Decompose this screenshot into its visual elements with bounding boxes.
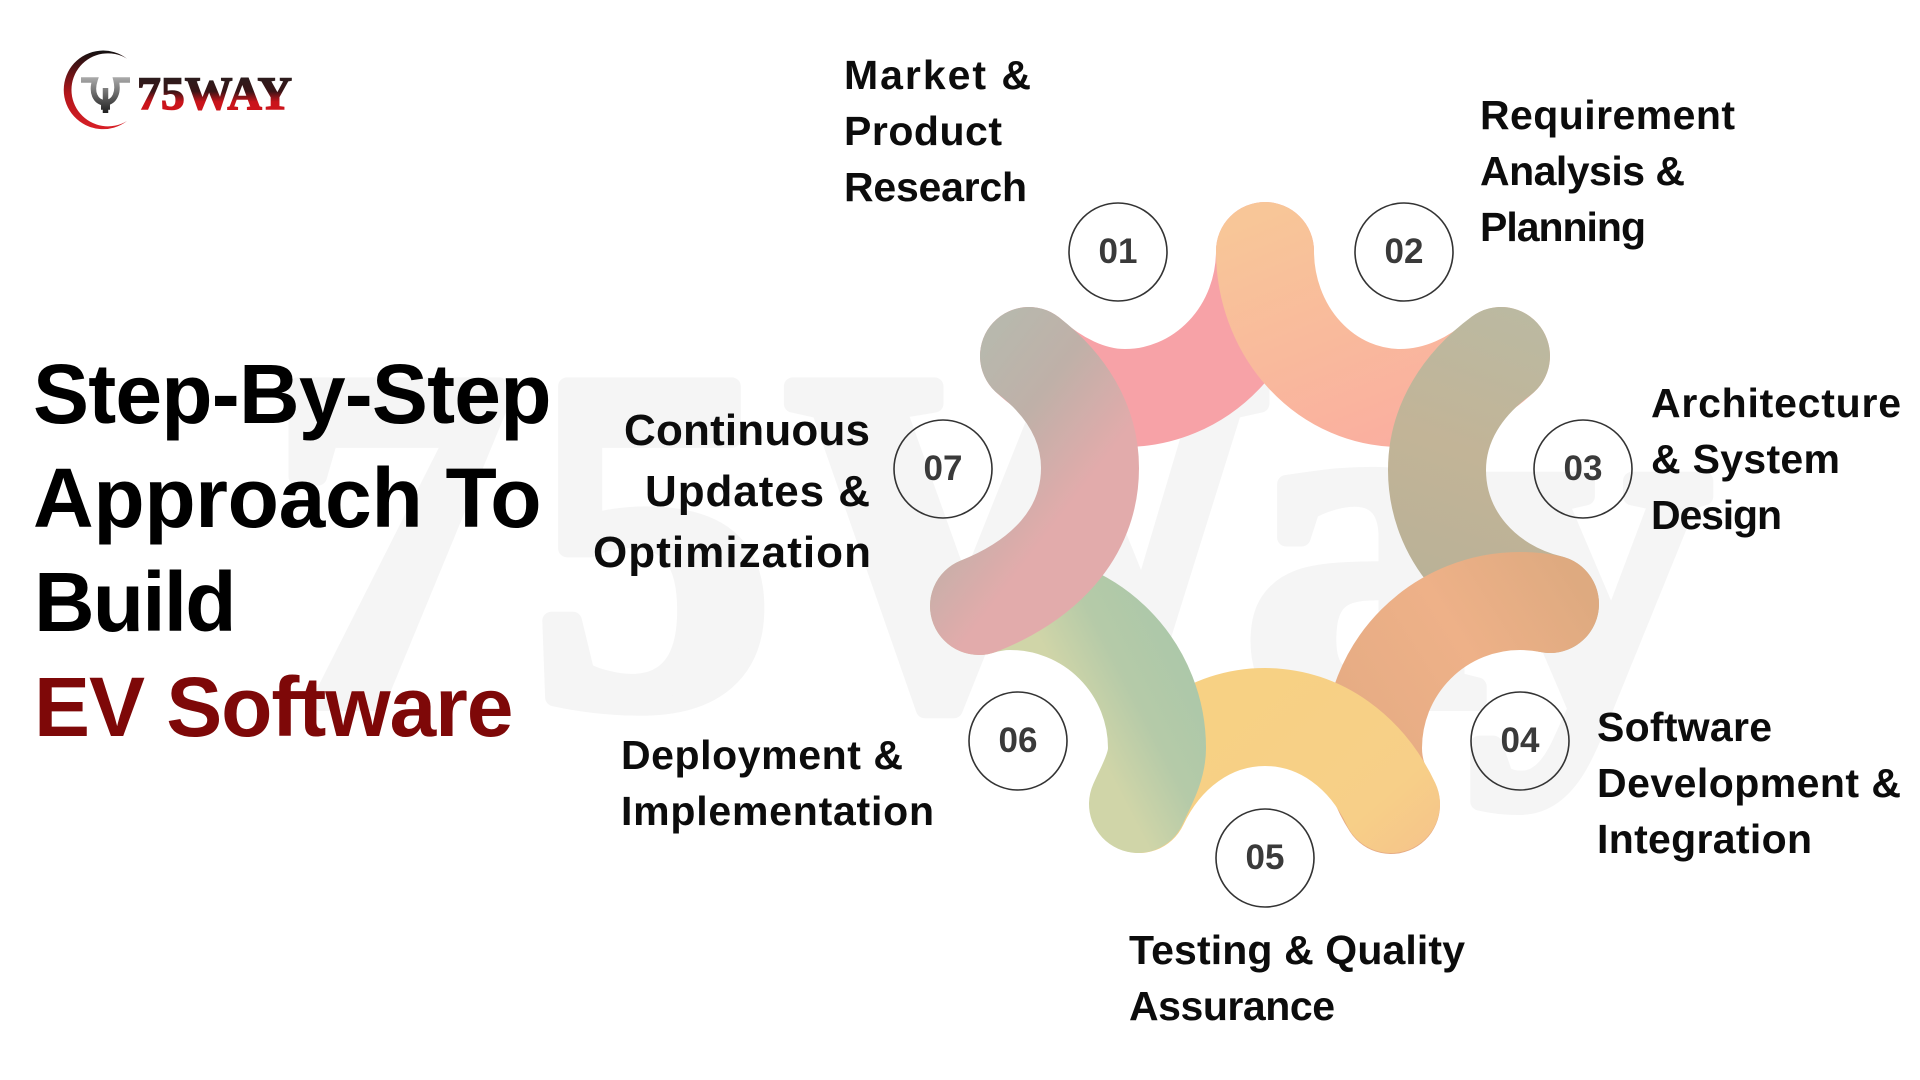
label: Deployment & Implementation: Implementation: [621, 788, 934, 834]
label: Architecture & System Design: Design: [1651, 492, 1782, 538]
step 03 number badge: 03: [1564, 449, 1602, 488]
label: Testing & Quality Assurance: [1129, 927, 1465, 1029]
title: Approach To: [33, 451, 542, 545]
label: Testing & Quality Assurance: Assurance: [1129, 983, 1335, 1029]
step 04 number badge: 04: [1501, 721, 1540, 760]
step 01 number badge: [1069, 203, 1167, 301]
step 05 number badge: 05: [1246, 838, 1284, 877]
label: Architecture & System Design: & System: [1651, 436, 1840, 482]
segment 03: olive: [1437, 356, 1550, 604]
label: Market & Product Research: [844, 52, 1031, 210]
label: Requirement Analysis & Planning: Requirement: [1480, 92, 1735, 138]
title: EV Software: [34, 660, 514, 754]
segment 05: yellow: [1139, 717, 1391, 804]
step 07 number badge: 07: [924, 449, 962, 488]
segment 07: rose grey: [979, 356, 1090, 606]
label: Market & Product Research: Research: [844, 164, 1027, 210]
label: Architecture & System Design: Architecture: [1651, 380, 1901, 426]
label: Market & Product Research: Product: [844, 108, 1002, 154]
step 01 number badge: 01: [1099, 232, 1137, 271]
segment 01: pink: [1029, 251, 1265, 398]
step 07 number badge: [894, 420, 992, 518]
label: Software Development & Integration: Integration: [1597, 816, 1812, 862]
label: Testing & Quality Assurance: Testing & Quality: [1129, 927, 1465, 973]
watermark: 75Way: 75Way: [270, 273, 1709, 807]
segment 02: peach: [1265, 251, 1501, 398]
logo emblem: [81, 80, 130, 113]
label: Requirement Analysis & Planning: Analysis &: [1480, 148, 1685, 194]
step 03 number badge: [1534, 420, 1632, 518]
step 06 number badge: 06: [999, 721, 1037, 760]
title: Build: [34, 555, 236, 649]
label: Deployment & Implementation: [621, 732, 934, 834]
segment 06: green: [979, 601, 1157, 804]
label: Requirement Analysis & Planning: Planning: [1480, 204, 1646, 250]
step 04 number badge: [1471, 692, 1569, 790]
label: Deployment & Implementation: Deployment &: [621, 732, 903, 778]
label: Architecture & System Design: [1651, 380, 1901, 538]
step 06 number badge: [969, 692, 1067, 790]
label: Continuous Updates & Optimization: Optimization: [593, 528, 871, 577]
label: Software Development & Integration: [1597, 704, 1901, 862]
label: Continuous Updates & Optimization: [593, 406, 871, 577]
step 02 number badge: 02: [1385, 232, 1423, 271]
label: Requirement Analysis & Planning: [1480, 92, 1735, 250]
title: [33, 347, 552, 754]
logo: 75WAY: [64, 51, 292, 129]
step 05 number badge: [1216, 809, 1314, 907]
logo wordmark: 75WAY: [137, 68, 292, 120]
segment 04: orange: [1373, 601, 1550, 805]
logo crescent: [64, 51, 127, 129]
label: Continuous Updates & Optimization: Updates &: [645, 467, 870, 516]
ring of seven curved segments: [979, 251, 1550, 805]
label: Software Development & Integration: Software: [1597, 704, 1772, 750]
label: Market & Product Research: Market &: [844, 52, 1031, 98]
label: Software Development & Integration: Development &: [1597, 760, 1901, 806]
label: Continuous Updates & Optimization: Continuous: [624, 406, 870, 455]
title: Step-By-Step: [33, 347, 552, 441]
step 02 number badge: [1355, 203, 1453, 301]
